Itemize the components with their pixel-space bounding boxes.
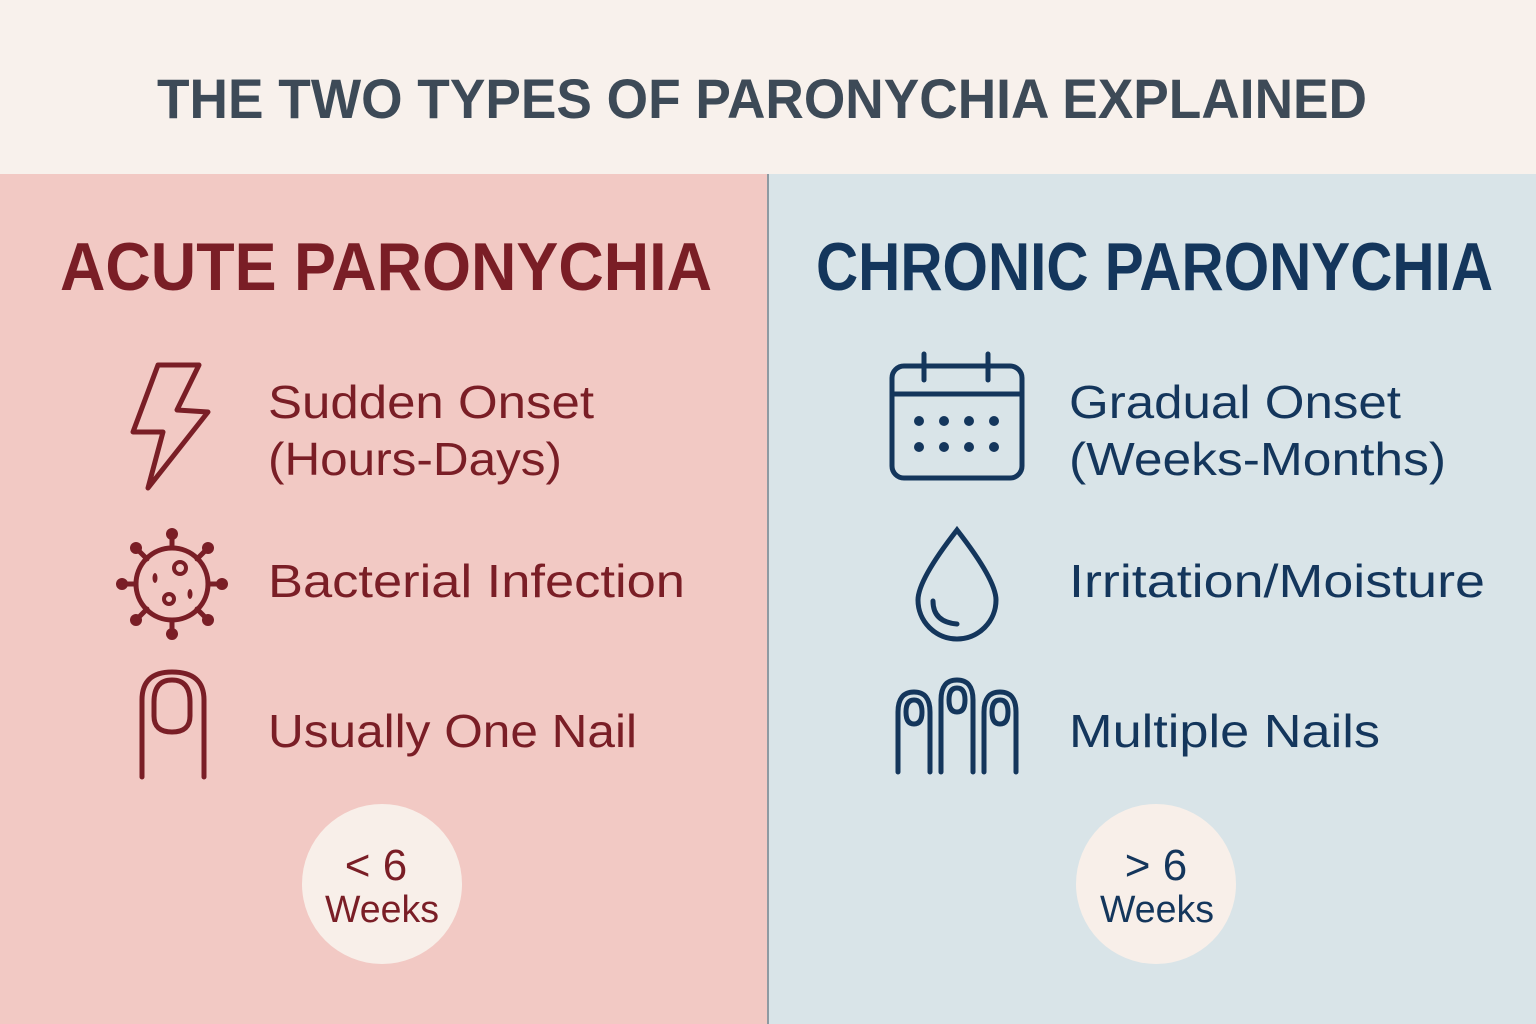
badge: less than 6 weeks: Weeks [325,889,439,931]
text: sudden onset: Sudden Onset [268,376,594,428]
heading: acute paronychia: ACUTE PARONYCHIA [60,229,712,305]
title: THE TWO TYPES OF PARONYCHIA EXPLAINED [157,67,1367,130]
badge: more than 6 weeks: > 6 [1125,841,1187,890]
icon: calendar [892,354,1022,478]
badge: more than 6 weeks [1076,804,1236,964]
icon: bacteria [116,528,228,640]
text: hours-days: (Hours-Days) [268,433,562,485]
text: irritation/moisture: Irritation/Moisture [1069,555,1485,607]
icon: water drop [918,530,996,639]
text: gradual onset: Gradual Onset [1069,376,1401,428]
text: bacterial infection: Bacterial Infection [268,555,685,607]
panel: chronic [768,174,1536,1024]
panel: acute [0,174,768,1024]
icon: finger [142,672,204,777]
text: weeks-months: (Weeks-Months) [1069,433,1446,485]
icon: lightning [133,365,208,488]
text: multiple nails: Multiple Nails [1069,705,1380,757]
badge: more than 6 weeks: Weeks [1100,889,1214,931]
icon: multiple fingers [898,680,1016,772]
badge: less than 6 weeks [302,804,462,964]
badge: less than 6 weeks: < 6 [345,841,407,890]
text: usually one nail: Usually One Nail [268,705,637,757]
